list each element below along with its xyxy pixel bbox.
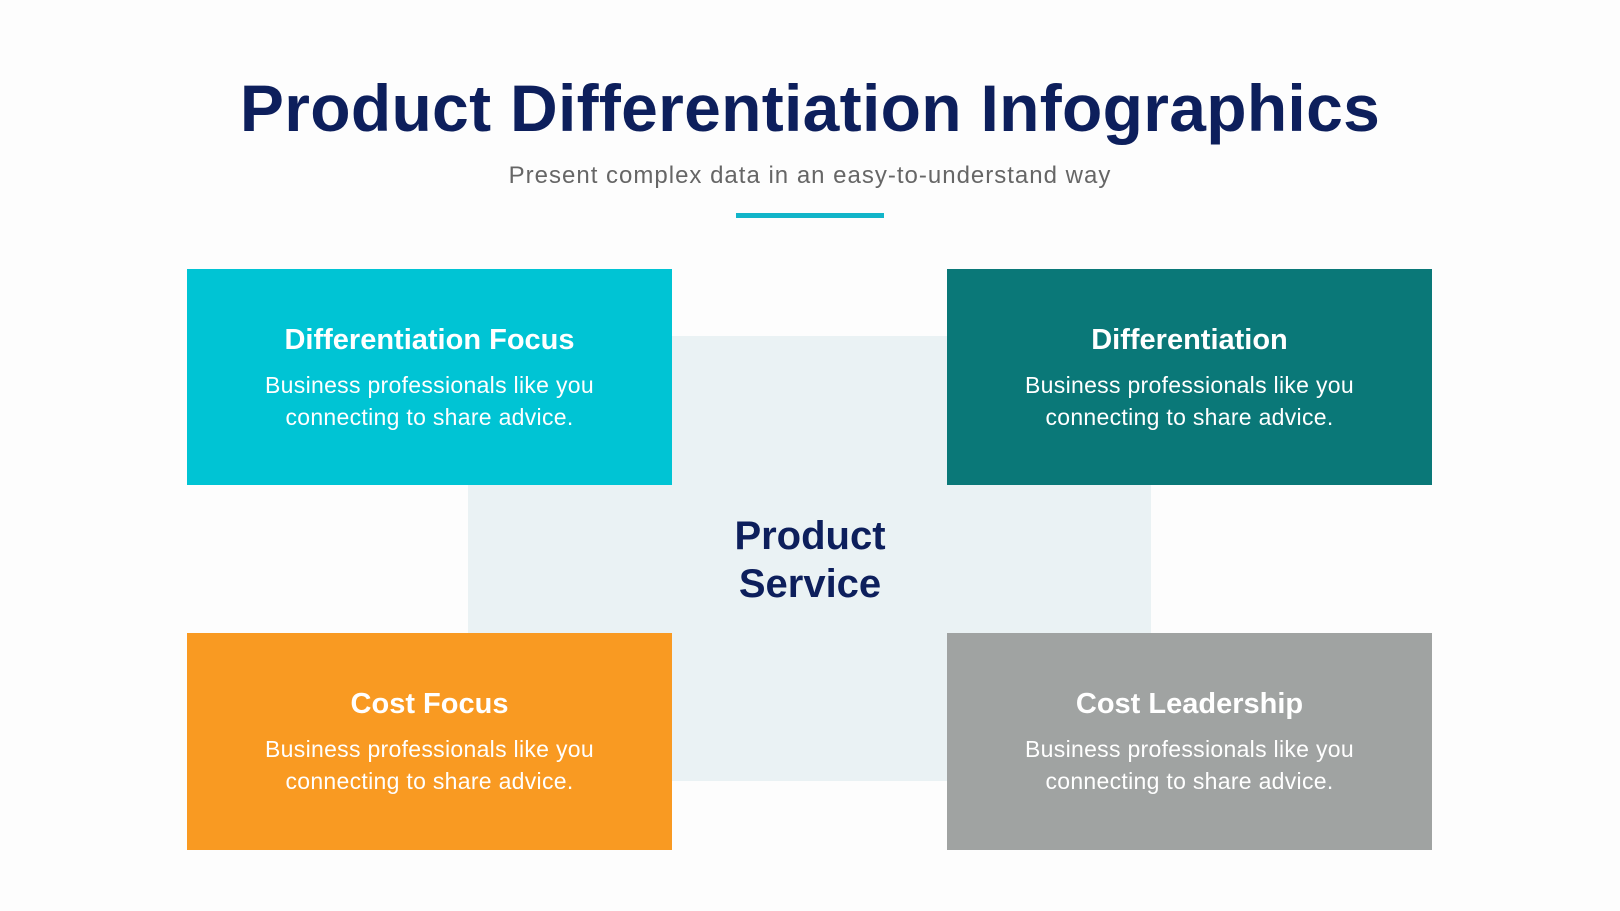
panel: Differentiation: Differentiation [1091,324,1288,356]
panel: Differentiation: connecting to share advice. [1045,404,1334,430]
panel: Cost Focus: connecting to share advice. [285,768,574,794]
panel: Cost Leadership: Cost Leadership [1076,688,1303,720]
panel: Cost Focus: Cost Focus [351,688,508,720]
panel: Cost Focus: Business professionals like you [265,736,594,762]
panel: Differentiation Focus [187,269,672,485]
center text: Product Service [734,514,886,606]
panel: Differentiation Focus: Differentiation Focus [284,324,574,356]
panel: Differentiation Focus: Business professionals like you [265,372,594,398]
panel: Cost Leadership [947,633,1432,850]
subtitle: Present complex data in an easy-to-understand way [509,162,1111,189]
panel: Differentiation: Business professionals like you [1025,372,1354,398]
panel: center background [468,336,1151,781]
center text: Product Service: Product [734,514,886,558]
panel: Cost Focus [187,633,672,850]
center text: Product Service: Service [739,562,881,606]
title: Product Differentiation Infographics [240,71,1380,145]
panel: Differentiation Focus: connecting to share advice. [285,404,574,430]
panel: Differentiation [947,269,1432,485]
panel: Cost Leadership: Business professionals like you [1025,736,1354,762]
panel: Cost Leadership: connecting to share advice. [1045,768,1334,794]
accent underline [736,213,884,218]
